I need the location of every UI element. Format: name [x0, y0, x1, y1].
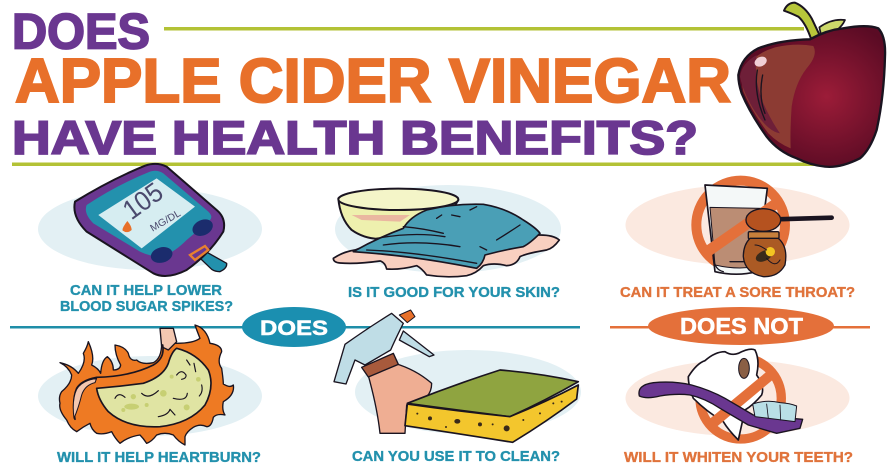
panel: teeth: [624, 349, 853, 466]
label: cleaning: CAN YOU USE IT TO CLEAN?: [352, 449, 560, 465]
sponge holes: [416, 401, 563, 431]
title line: apple cider vinegar: APPLE CIDER VINEGAR: [15, 47, 731, 116]
apple body: [738, 26, 885, 167]
icon: blood drop: [123, 221, 132, 232]
puddle: [333, 235, 559, 277]
prohibition bar: [708, 372, 773, 427]
spoon: [777, 218, 832, 219]
icon: bowl and towel: [333, 189, 559, 277]
divider: does not: [610, 307, 870, 345]
icon: glucose meter: [74, 164, 227, 276]
bee: [754, 245, 780, 264]
tooth: [688, 349, 763, 440]
prohibition ring: [700, 358, 781, 439]
duodenum lining: [73, 378, 97, 418]
apple light side: [742, 45, 815, 148]
stomach: [97, 348, 211, 427]
toothbrush bristles: [753, 401, 797, 422]
bowl rim: [338, 189, 458, 210]
label: blood sugar: BLOOD SUGAR SPIKES?: [60, 299, 233, 315]
towel: [353, 204, 540, 268]
background ellipse: [626, 360, 850, 436]
background ellipse: [38, 356, 262, 436]
sponge side: [405, 385, 578, 442]
apple leaf: [819, 20, 845, 37]
divider: does: [10, 307, 580, 347]
honey jar lid: [748, 232, 779, 239]
bowl pink water: [352, 215, 410, 222]
title: [12, 4, 731, 164]
apple highlight: [753, 55, 768, 69]
esophagus: [160, 328, 177, 350]
acid squiggles: [115, 360, 202, 417]
towel folds: [367, 207, 520, 263]
panel: cleaning: [334, 310, 581, 465]
spray head: [334, 313, 403, 384]
flames: [59, 325, 234, 445]
apple crease: [756, 70, 765, 120]
panel: blood sugar: [38, 164, 262, 315]
meter body: [74, 164, 224, 276]
stomach acid specks: [121, 375, 201, 412]
label: blood sugar: CAN IT HELP LOWER: [70, 283, 223, 299]
honey jar: [743, 238, 786, 277]
sponge top: [407, 370, 578, 417]
background ellipse: [626, 185, 850, 265]
icon: honey and glass: [696, 181, 832, 277]
background ellipse: [355, 350, 581, 434]
prohibition ring: [696, 181, 785, 269]
glass: [705, 185, 767, 274]
apple sheen: [740, 55, 780, 133]
label: heartburn: WILL IT HELP HEARTBURN?: [57, 450, 261, 466]
bristle lines: [767, 404, 781, 420]
icon: apple: [738, 3, 885, 167]
meter unit: MG/DL: [149, 208, 183, 234]
does label: DOES: [260, 317, 328, 340]
spray nozzle: [399, 310, 415, 323]
meter screen: [98, 178, 195, 248]
tooth cavity: [739, 358, 749, 378]
title line: does: DOES: [12, 4, 150, 60]
icon: spray bottle and sponge: [334, 310, 578, 442]
background ellipse: [38, 188, 262, 270]
spray trigger: [399, 331, 434, 357]
background ellipse: [335, 185, 561, 273]
prohibition bar: [700, 197, 783, 258]
does not pill: [648, 307, 834, 345]
label: teeth: WILL IT WHITEN YOUR TEETH?: [624, 450, 853, 466]
glass liquid: [710, 207, 763, 268]
label: blood sugar: [60, 283, 233, 315]
meter reading: 105: [117, 176, 169, 226]
meter bezel: [86, 171, 211, 257]
bottle collar: [362, 353, 398, 377]
label: sore throat: CAN IT TREAT A SORE THROAT?: [620, 285, 855, 301]
panel: heartburn: [38, 325, 262, 466]
toothbrush handle: [639, 382, 803, 433]
meter button right: [190, 216, 216, 239]
icon: tooth and toothbrush: [639, 349, 803, 440]
meter test strip: [195, 249, 227, 272]
stomach band: [74, 345, 163, 419]
meter button left: [149, 245, 174, 265]
label: skin: IS IT GOOD FOR YOUR SKIN?: [348, 285, 560, 301]
bowl: [338, 198, 458, 239]
title line: have health benefits: HAVE HEALTH BENEFITS?: [12, 111, 698, 164]
meter strip port: [190, 246, 208, 260]
glass base: [713, 258, 750, 272]
apple stem: [784, 3, 821, 41]
does not label: DOES NOT: [680, 313, 803, 339]
does pill: [242, 307, 346, 347]
icon: stomach in flames: [59, 325, 234, 445]
hand: [368, 363, 432, 433]
panel: skin: [333, 185, 561, 301]
panel: sore throat: [620, 181, 855, 301]
